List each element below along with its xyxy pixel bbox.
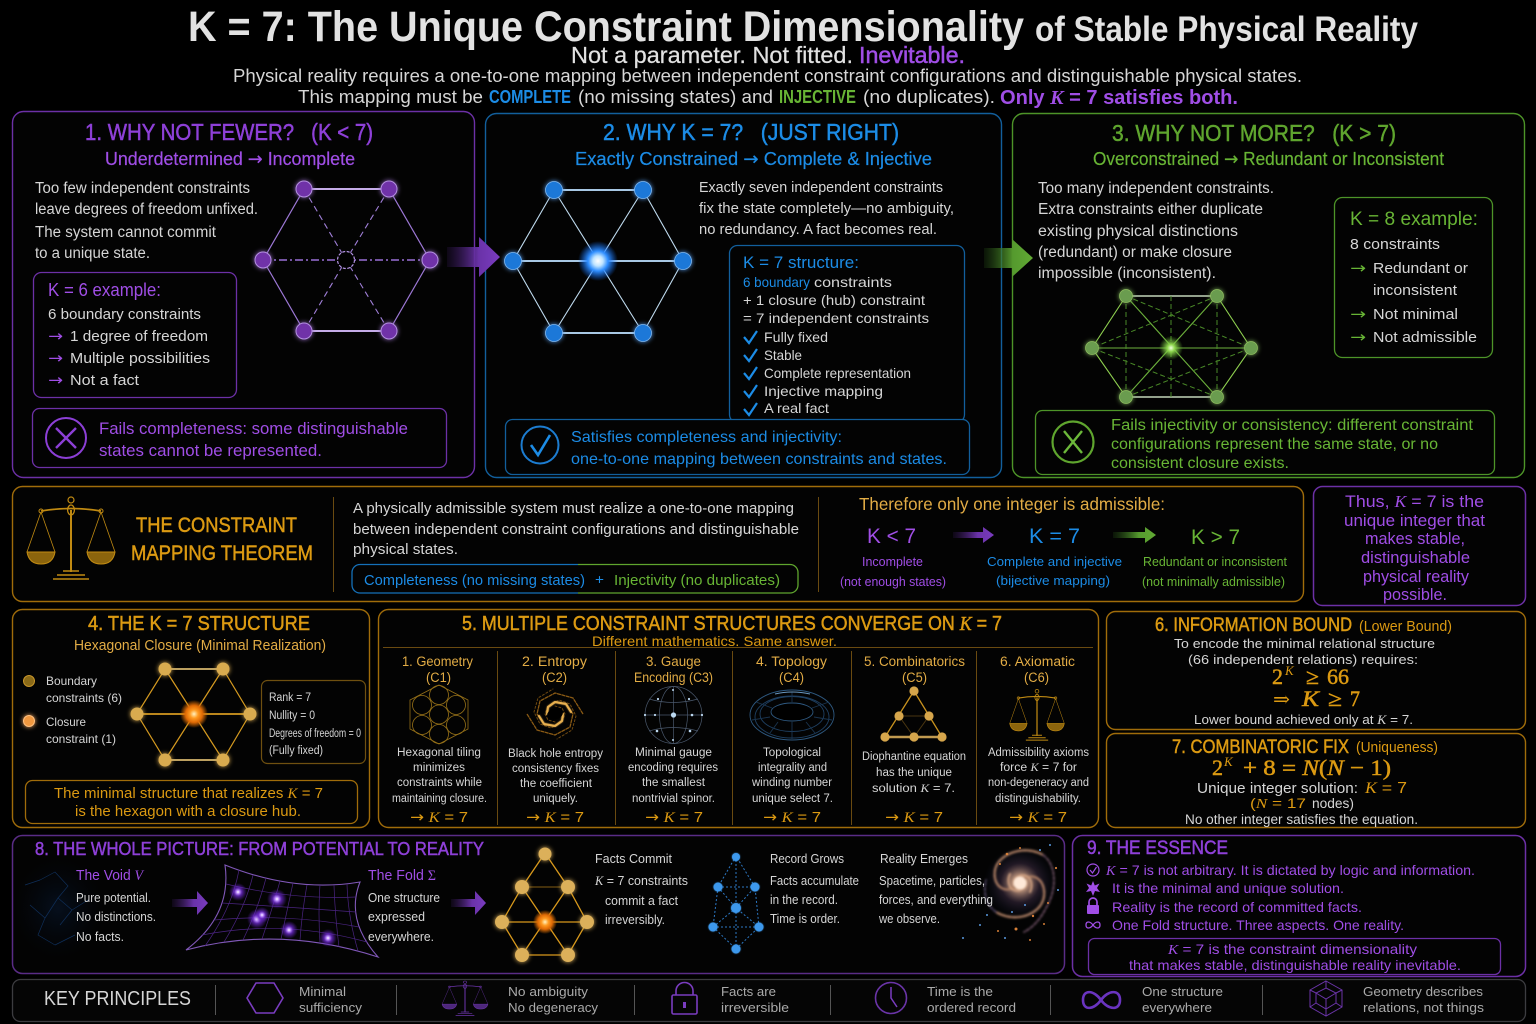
subheading: Hexagonal Closure (Minimal Realization) (74, 638, 326, 654)
icon: check (1087, 864, 1099, 876)
callout: minimal structure (26, 780, 358, 824)
diagram: record network (708, 853, 764, 954)
pill: completeness plus injectivity (352, 564, 798, 593)
panel: the essence (1072, 836, 1526, 976)
column: geometry: → K = 7 (410, 808, 468, 826)
heading: (Uniqueness) (1356, 740, 1438, 756)
equation: lower bound: ⇒ (1273, 689, 1290, 711)
intro text: COMPLETE (489, 87, 571, 107)
heading: 5. MULTIPLE CONSTRAINT STRUCTURES CONVERGE ON K = 7 (462, 613, 1002, 635)
column: geometry: (C1) (426, 670, 451, 685)
callout: K = 6 example (34, 272, 236, 398)
body text (699, 180, 954, 238)
equation: lower bound: 2 (1272, 664, 1283, 689)
explanation: To encode the minimal relational structure (1174, 636, 1435, 651)
title: of Stable Physical Reality (1035, 10, 1418, 49)
column: gauge encoding: nontrivial spinor. (632, 793, 715, 805)
callout: K = 7 structure: = 7 independent constraints (743, 310, 929, 326)
text: record grows: Time is order. (770, 912, 840, 926)
icon: balance scale (1010, 689, 1064, 740)
icon: triangle of nodes (880, 686, 947, 742)
heading: 6. INFORMATION BOUND (1155, 614, 1352, 636)
principle: minimal sufficiency: sufficiency (299, 1000, 363, 1015)
text: reality emerges: Reality Emerges (880, 852, 968, 866)
panel: thus conclusion: distinguishable (1361, 548, 1470, 567)
callout: K = 7 structure: Complete representation (764, 365, 911, 381)
column: combinatorics: (C5) (902, 670, 927, 685)
callout: K = 7 structure: 6 boundary (743, 274, 810, 290)
column: gauge encoding: Encoding (C3) (634, 670, 713, 685)
text: the void: No facts. (76, 930, 124, 944)
text: facts commit: Facts Commit (595, 852, 673, 866)
body text: Exactly seven independent constraints (699, 180, 943, 196)
body text: (redundant) or make closure (1038, 244, 1232, 261)
principle: no ambiguity (442, 981, 599, 1015)
outcome: K greater than 7 (1142, 526, 1287, 589)
arrow (172, 891, 208, 915)
panel: combinatoric fix (1106, 734, 1526, 828)
equation: combinatoric: + 8 = N(N − 1) (1243, 755, 1391, 780)
callout: K = 8 example: Not minimal (1373, 306, 1458, 323)
body text: Too many independent constraints. (1038, 180, 1274, 197)
text: facts commit: commit a fact (605, 894, 679, 908)
column: entropy: (C2) (542, 670, 567, 685)
body text (35, 180, 258, 262)
subheading: Underdetermined → Incomplete (105, 149, 355, 170)
outcome: K equals 7: Complete and injective (987, 554, 1122, 569)
column: gauge encoding: 3. Gauge (646, 654, 701, 669)
solution: Unique integer solution: (1197, 780, 1358, 797)
text: reality emerges: we observe. (878, 912, 940, 926)
column: geometry: maintaining closure. (392, 793, 487, 805)
text: the void: Pure potential. (76, 891, 151, 905)
text: record grows: Facts accumulate (770, 874, 859, 888)
callout: fails completeness: states cannot be represented. (99, 441, 322, 460)
callout: rank and nullity: (Fully fixed) (269, 745, 323, 757)
column: combinatorics (862, 654, 966, 826)
heading: theorem name: THE CONSTRAINT (136, 514, 297, 537)
column: axiomatic: → K = 7 (1009, 808, 1067, 826)
column: gauge encoding: Minimal gauge (635, 747, 712, 759)
column: combinatorics: → K = 7 (885, 808, 943, 826)
body text: The system cannot commit (35, 224, 217, 241)
callout: fails injectivity: consistent closure exists. (1111, 455, 1289, 472)
outcome: K equals 7: (bijective mapping) (996, 573, 1110, 588)
callout: rank and nullity: Degrees of freedom = 0 (269, 728, 361, 740)
diagram: hexagon with missing hub (255, 181, 438, 339)
list: essence points: K = 7 is not arbitrary. It is dictated by logic and information. (1105, 862, 1475, 879)
body text (1038, 180, 1274, 282)
outcome: K less than 7 (840, 525, 946, 589)
callout: K = 7 structure: Stable (764, 347, 802, 363)
heading: one integer admissible: Therefore only one integer is admissible: (859, 494, 1165, 514)
icon: torus (750, 690, 834, 740)
icon: star (1086, 881, 1100, 896)
callout: minimal structure: is the hexagon with a closure hub. (75, 803, 301, 820)
callout: K = 6 example: → (48, 349, 63, 367)
callout: K = 6 example: 1 degree of freedom (70, 328, 208, 345)
solution: nodes) (1312, 796, 1354, 811)
callout: essence conclusion (1088, 938, 1500, 974)
legend: constraint (1) (46, 732, 116, 746)
icon: hexagonal tiling (410, 685, 468, 744)
panel: K = 7 structure (12, 610, 370, 828)
principle: one structure: everywhere (1142, 1000, 1212, 1015)
callout: K = 8 example: → (1350, 305, 1366, 323)
principle: time record: Time is the (927, 984, 993, 999)
equation: lower bound (1272, 663, 1360, 711)
intro text: Physical reality requires a one-to-one mapping between independent constraint configurations and distinguishable physical states. (233, 65, 1302, 86)
principle: no ambiguity: No degeneracy (508, 1000, 599, 1015)
note: lower bound achieved: Lower bound achieved only at K = 7. (1194, 712, 1413, 727)
callout: K = 8 example: Not admissible (1373, 329, 1477, 346)
principle: irreversible facts: irreversible (721, 1000, 789, 1015)
panel: why not fewer (12, 112, 474, 478)
text: reality emerges: Spacetime, particles, (879, 874, 985, 888)
column: topology: → K = 7 (763, 808, 821, 826)
principle: one structure (1083, 984, 1223, 1015)
solution (1185, 780, 1418, 827)
callout: rank and nullity (262, 680, 366, 764)
diagram: hexagon with hub (130, 662, 256, 766)
callout: K = 6 example: → (48, 371, 63, 389)
column: axiomatic: distinguishability. (995, 793, 1081, 805)
legend: Closure (46, 715, 86, 729)
explanation (1174, 636, 1435, 667)
callout: K = 8 example (1334, 198, 1492, 358)
principle: minimal sufficiency (247, 983, 363, 1015)
heading: 9. THE ESSENCE (1087, 838, 1228, 859)
icon: gauge sphere (644, 686, 703, 744)
callout: satisfies completeness: one-to-one mapping between constraints and states. (571, 451, 947, 468)
outcome: K equals 7 (987, 525, 1122, 588)
panel: thus conclusion: makes stable, (1365, 529, 1465, 548)
callout: essence conclusion: K = 7 is the constraint dimensionality (1167, 941, 1417, 958)
equation: lower bound: K (1301, 686, 1321, 711)
callout: fails completeness: Fails completeness: some distinguishable (99, 419, 408, 438)
body text: leave degrees of freedom unfixed. (35, 201, 258, 218)
heading: KEY PRINCIPLES (44, 988, 191, 1010)
intro text: This mapping must be (298, 86, 483, 107)
panel: thus conclusion (1314, 486, 1526, 606)
principle: minimal sufficiency: Minimal (299, 984, 346, 999)
text: the fold: One structure (368, 891, 440, 905)
column: entropy: uniquely. (533, 793, 578, 805)
column: topology: unique select 7. (752, 793, 833, 805)
intro text: (no duplicates). (863, 86, 995, 107)
callout: K = 7 structure: constraints (814, 274, 892, 290)
equation: lower bound: K (1284, 663, 1295, 678)
text: the void: The Void V (76, 868, 145, 884)
text: reality emerges: forces, and everything (879, 893, 993, 907)
column: axiomatic: force K = 7 for (1000, 762, 1077, 774)
equation: lower bound: 66 (1327, 664, 1349, 689)
column: entropy: Black hole entropy (508, 748, 603, 760)
column: combinatorics: has the unique (876, 767, 952, 779)
body text: impossible (inconsistent). (1038, 265, 1216, 282)
arrow (1113, 527, 1156, 543)
callout: K = 6 example: → (48, 327, 63, 345)
column: gauge encoding (628, 654, 718, 826)
intro text: Only K = 7 satisfies both. (1000, 87, 1238, 109)
principle: geometry: relations, not things (1363, 1000, 1485, 1015)
intro text: (no missing states) and (578, 86, 773, 107)
callout: K = 6 example: K = 6 example: (48, 280, 161, 300)
text: record grows (770, 852, 859, 926)
outcome: K less than 7: K < 7 (867, 525, 916, 548)
heading: theorem name (131, 514, 313, 565)
outcome: K equals 7: K = 7 (1029, 525, 1080, 548)
image: fold grid (186, 865, 378, 957)
panel: constraint mapping theorem (12, 486, 1304, 602)
column: axiomatic (988, 654, 1089, 826)
callout: satisfies completeness: Satisfies completeness and injectivity: (571, 429, 842, 446)
panel: multiple constraint structures (378, 610, 1098, 828)
explanation: (66 independent relations) requires: (1188, 652, 1418, 667)
column: geometry: 1. Geometry (402, 654, 473, 669)
column: axiomatic: (C6) (1024, 670, 1049, 685)
pill: completeness plus injectivity: + (595, 571, 604, 587)
column: combinatorics: 5. Combinatorics (864, 654, 965, 669)
icon: infinity (1086, 922, 1100, 928)
theorem statement: A physically admissible system must realize a one-to-one mapping (353, 500, 794, 517)
subtitle: Not a parameter. Not fitted. (571, 42, 853, 68)
solution: K = 7 (1364, 780, 1407, 797)
callout: rank and nullity: Rank = 7 (269, 692, 311, 704)
legend (24, 674, 122, 746)
principle: time record (876, 982, 1016, 1015)
panel: thus conclusion: possible. (1383, 585, 1447, 604)
text: the void: No distinctions. (76, 910, 156, 924)
text: facts commit: irreversibly. (605, 913, 665, 927)
subtitle: Inevitable. (859, 42, 965, 68)
principle: time record: ordered record (927, 1000, 1016, 1015)
callout: K = 7 structure: A real fact (764, 400, 829, 416)
legend: constraints (6) (46, 691, 122, 705)
text: the void (76, 868, 156, 944)
column: geometry (392, 654, 487, 826)
diagram: overconstrained hexagon (1086, 290, 1258, 404)
list: essence points (1086, 862, 1475, 933)
arrow (451, 891, 486, 915)
column: geometry: constraints while (397, 777, 482, 789)
outcome: K less than 7: (not enough states) (840, 574, 946, 589)
column: topology: integrality and (758, 762, 827, 774)
panel: the whole picture (12, 836, 1064, 974)
text: the fold: The Fold Σ (368, 868, 436, 884)
callout: K = 8 example: Redundant or (1373, 260, 1468, 277)
solution: (N = 17 (1250, 796, 1306, 811)
column: topology: (C4) (779, 670, 804, 685)
column: topology: Topological (763, 747, 821, 759)
callout: fails injectivity: configurations represent the same state, or no (1111, 436, 1438, 453)
principle: irreversible facts: Facts are (721, 984, 776, 999)
column: combinatorics: Diophantine equation (862, 751, 966, 763)
column: gauge encoding: → K = 7 (645, 808, 703, 826)
column: geometry: minimizes (413, 762, 465, 774)
equation: lower bound: ≥ (1306, 664, 1319, 689)
principle: irreversible facts (672, 982, 789, 1015)
panel: why not more (1012, 114, 1524, 478)
callout: K = 6 example: Multiple possibilities (70, 350, 210, 367)
callout: K = 7 structure: Injective mapping (764, 383, 883, 399)
panel: thus conclusion: Thus, K = 7 is the (1345, 492, 1484, 511)
column: topology: winding number (751, 777, 832, 789)
callout: K = 8 example: inconsistent (1373, 282, 1458, 299)
callout: satisfies completeness (506, 420, 970, 474)
subheading: Overconstrained → Redundant or Inconsistent (1093, 149, 1444, 170)
callout: fails injectivity: Fails injectivity or consistency: different constraint (1111, 417, 1474, 434)
callout: fails completeness (32, 408, 446, 468)
outcome: K greater than 7: Redundant or inconsistent (1143, 554, 1287, 569)
callout: K = 7 structure: + 1 closure (hub) constraint (743, 292, 925, 308)
pill: completeness plus injectivity: Injectivity (no duplicates) (614, 572, 780, 589)
heading: 7. COMBINATORIC FIX (1172, 736, 1349, 758)
column: entropy: → K = 7 (526, 808, 584, 826)
callout: essence conclusion: that makes stable, distinguishable reality inevitable. (1129, 957, 1461, 973)
list: essence points: Reality is the record of committed facts. (1112, 899, 1362, 915)
image: spiral galaxy (962, 844, 1059, 941)
callout: K = 8 example: K = 8 example: (1350, 209, 1478, 230)
equation: combinatoric: K (1223, 754, 1234, 769)
panel: thus conclusion: unique integer that (1344, 511, 1485, 530)
intro text (233, 65, 1302, 109)
column: topology (750, 654, 834, 826)
column: axiomatic: 6. Axiomatic (1000, 654, 1075, 669)
text: facts commit (594, 852, 688, 927)
principle: geometry: Geometry describes (1363, 984, 1484, 999)
body text: no redundancy. A fact becomes real. (699, 222, 937, 238)
solution: No other integer satisfies the equation. (1185, 812, 1418, 827)
callout: fails injectivity (1036, 410, 1494, 474)
theorem statement (353, 500, 799, 558)
heading: theorem name: MAPPING THEOREM (131, 542, 313, 565)
arrow: fewer to just right (447, 237, 500, 277)
icon: balance scale (27, 497, 115, 579)
equation: lower bound: ≥ (1328, 686, 1342, 711)
text: record grows: Record Grows (770, 852, 844, 866)
column: gauge encoding: the smallest (642, 777, 706, 789)
arrow (953, 527, 994, 543)
callout: K = 7 structure (730, 246, 964, 422)
subheading: Different mathematics. Same answer. (592, 633, 837, 649)
column: combinatorics: solution K = 7. (872, 783, 955, 795)
text: the fold: everywhere. (368, 930, 434, 944)
column: axiomatic: Admissibility axioms (988, 747, 1089, 759)
text: the fold: expressed (368, 910, 425, 924)
panel: why k = 7 (486, 114, 1002, 478)
callout: K = 6 example: Not a fact (70, 372, 140, 389)
icon: black hole swirl (527, 689, 583, 739)
heading: (Lower Bound) (1359, 619, 1452, 635)
principle: no ambiguity: No ambiguity (508, 984, 589, 999)
outcome: K less than 7: Incomplete (862, 554, 923, 569)
column: entropy: the coefficient (520, 778, 593, 790)
outcome: K greater than 7: (not minimally admissible) (1142, 574, 1285, 589)
image: void nebula (13, 858, 103, 958)
callout: K = 6 example: 6 boundary constraints (48, 306, 201, 323)
heading: why k = 7: 2. WHY K = 7? (JUST RIGHT) (603, 119, 899, 145)
outcome: K greater than 7: K > 7 (1191, 526, 1240, 549)
column: gauge encoding: encoding requires (628, 762, 718, 774)
legend: Boundary (46, 674, 97, 688)
pill: completeness plus injectivity: Completeness (no missing states) (364, 572, 585, 589)
equation: combinatoric: 2 (1212, 755, 1223, 780)
callout: K = 8 example: 8 constraints (1350, 236, 1440, 253)
principle: one structure: One structure (1142, 984, 1223, 999)
text: reality emerges (878, 852, 993, 926)
callout: K = 8 example: → (1350, 328, 1366, 346)
text: facts commit: K = 7 constraints (594, 874, 688, 888)
intro text: INJECTIVE (779, 87, 856, 107)
callout: K = 7 structure: K = 7 structure: (743, 253, 859, 272)
body text: Too few independent constraints (35, 180, 250, 197)
text: record grows: in the record. (770, 893, 838, 907)
callout: K = 7 structure: Fully fixed (764, 329, 828, 345)
arrow: just right to more (984, 239, 1033, 277)
body text: existing physical distinctions (1038, 223, 1238, 240)
panel: key principles (12, 980, 1526, 1022)
column: entropy: 2. Entropy (522, 654, 587, 669)
column: topology: 4. Topology (756, 654, 827, 669)
callout: rank and nullity: Nullity = 0 (269, 710, 315, 722)
panel: thus conclusion: physical reality (1363, 567, 1469, 586)
column: axiomatic: non-degeneracy and (988, 777, 1089, 789)
theorem statement: physical states. (353, 541, 458, 558)
subheading: Exactly Constrained → Complete & Injective (575, 149, 932, 170)
equation: lower bound: 7 (1350, 686, 1360, 711)
body text: fix the state completely—no ambiguity, (699, 201, 954, 217)
column: entropy (508, 654, 603, 826)
list: essence points: One Fold structure. Three aspects. One reality. (1112, 917, 1404, 933)
heading: why not fewer: 1. WHY NOT FEWER? (K < 7) (85, 119, 373, 145)
text: the fold (368, 868, 440, 944)
icon: lock (1087, 898, 1099, 914)
column: geometry: Hexagonal tiling (397, 747, 481, 759)
callout: minimal structure: The minimal structure that realizes K = 7 (54, 785, 323, 802)
list: essence points: It is the minimal and unique solution. (1112, 880, 1344, 896)
panel: information bound (1106, 612, 1526, 730)
callout: K = 8 example: → (1350, 259, 1366, 277)
theorem statement: between independent constraint configurations and distinguishable (353, 521, 799, 538)
body text: to a unique state. (35, 245, 150, 262)
diagram: hexagon with closure hub (504, 182, 692, 342)
body text: Extra constraints either duplicate (1038, 201, 1263, 218)
heading: why not more: 3. WHY NOT MORE? (K > 7) (1112, 120, 1396, 146)
title: K = 7: The Unique Constraint Dimensionality (188, 4, 1024, 51)
column: entropy: consistency fixes (512, 763, 599, 775)
heading: 4. THE K = 7 STRUCTURE (88, 613, 310, 635)
heading: 8. THE WHOLE PICTURE: FROM POTENTIAL TO REALITY (35, 838, 484, 859)
principle: geometry (1310, 981, 1485, 1016)
diagram: facts lattice (495, 848, 594, 962)
